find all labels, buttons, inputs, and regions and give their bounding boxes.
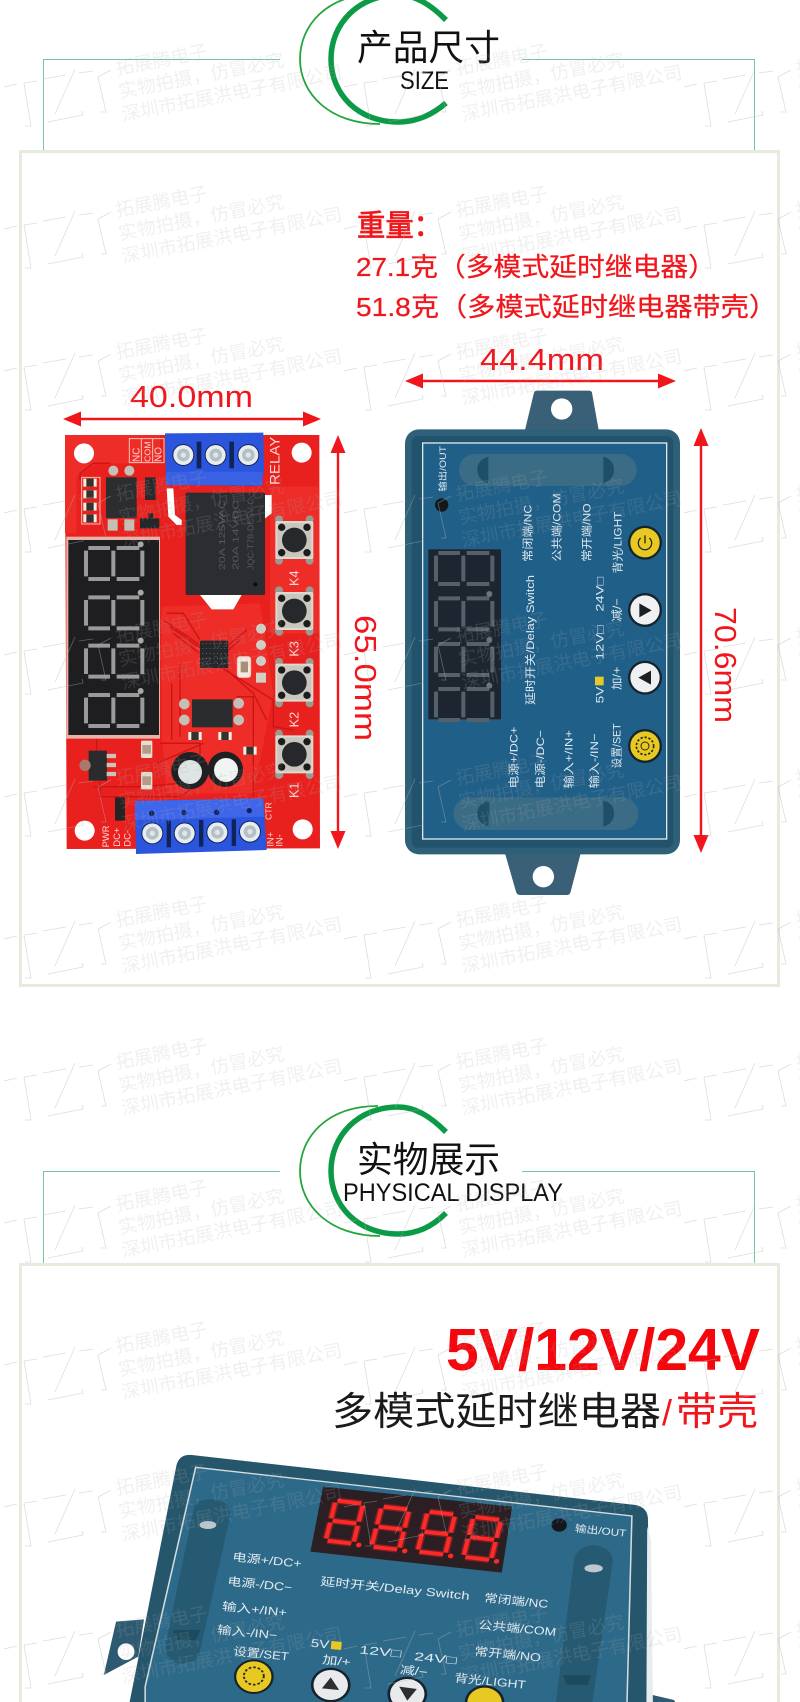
- silk labels PWR, IN, CTR: PWR: [101, 825, 111, 847]
- dimension: 65.0mm height arrow: [330, 435, 383, 849]
- small components top-left: [82, 466, 159, 531]
- weight text: 重量：: [357, 210, 442, 243]
- tactile buttons: K4: [287, 571, 301, 586]
- panel labels: 电源-/DC−: [227, 1575, 293, 1594]
- panel labels: 背光/LIGHT: [610, 511, 624, 573]
- product name heading: 带壳: [676, 1391, 758, 1434]
- panel labels: 加/+: [611, 667, 624, 690]
- case body: [405, 429, 680, 854]
- panel labels: 加/+: [322, 1653, 351, 1669]
- panel labels: 5V: [595, 686, 607, 703]
- panel labels: 电源+/DC+: [506, 727, 520, 788]
- panel labels: 常开端/NO: [581, 503, 594, 562]
- top terminal block: [165, 433, 264, 486]
- silk labels PWR, IN, CTR: DC-: [123, 830, 133, 847]
- panel labels: 背光/LIGHT: [454, 1672, 527, 1692]
- section header: physical display: PHYSICAL DISPLAY: [343, 1179, 563, 1207]
- case body: [129, 1455, 651, 1702]
- dimension: 44.4mm width arrow: [405, 342, 676, 388]
- panel labels: 输入-/IN−: [216, 1622, 278, 1642]
- bottom terminal block: [135, 798, 267, 854]
- panel labels: 设置/SET: [233, 1645, 290, 1663]
- silk labels NC COM NO: [129, 436, 282, 485]
- panel labels: 减/−: [611, 598, 624, 622]
- silk labels PWR, IN, CTR: IN+: [265, 832, 275, 847]
- panel labels: 输入-/IN−: [587, 733, 601, 788]
- optocoupler: [179, 698, 257, 755]
- panel labels: 输入+/IN+: [221, 1599, 288, 1619]
- weight text: 51.8克（多模式延时继电器带壳）: [356, 292, 777, 322]
- weight text: [356, 210, 777, 322]
- panel labels: 延时开关/Delay Switch: [320, 1575, 470, 1603]
- panel labels: 12V□: [359, 1643, 403, 1660]
- product name heading: 多模式延时继电器: [332, 1391, 661, 1434]
- panel labels: 24V□: [413, 1650, 459, 1667]
- panel labels: 设置/SET: [611, 723, 624, 768]
- front label: [145, 1467, 632, 1702]
- dimension: 40.0mm width arrow: 40.0mm: [130, 379, 253, 414]
- panel labels: 公共端/COM: [478, 1618, 557, 1639]
- panel labels: 延时开关/Delay Switch: [523, 575, 537, 705]
- photo: red relay circuit board: [65, 433, 320, 854]
- dimension: 65.0mm height arrow: 65.0mm: [348, 615, 383, 741]
- section header: product size: 产品尺寸: [357, 27, 500, 68]
- tactile buttons: K3: [287, 641, 301, 657]
- seven-segment display: [66, 537, 160, 739]
- silk labels PWR, IN, CTR: DC+: [112, 828, 122, 847]
- dimension: 40.0mm width arrow: [63, 379, 321, 426]
- panel labels: 输出/OUT: [574, 1522, 627, 1540]
- microcontroller and pads: [199, 624, 266, 683]
- panel labels: 公共端/COM: [551, 493, 564, 562]
- photo: enclosure front view: [405, 391, 680, 895]
- silk labels PWR, IN, CTR: [101, 802, 285, 847]
- product name heading: /: [662, 1392, 672, 1433]
- panel labels: 减/−: [399, 1663, 428, 1679]
- front label: [423, 443, 667, 839]
- dimension: 70.6mm height arrow: 70.6mm: [708, 607, 743, 723]
- tactile buttons: K1: [287, 783, 301, 798]
- panel buttons: [234, 1659, 504, 1702]
- panel labels: [216, 1522, 627, 1692]
- silk labels PWR, IN, CTR: CTR: [264, 802, 274, 820]
- panel labels: 电源+/DC+: [232, 1551, 303, 1570]
- weight text: 27.1克（多模式延时继电器）: [356, 252, 716, 282]
- panel labels: 电源-/DC−: [533, 730, 547, 788]
- panel: dimensions: [20, 152, 778, 986]
- relay: 20A 14VDC: [231, 500, 240, 570]
- tactile buttons: K2: [287, 712, 301, 727]
- panel labels: 常开端/NO: [473, 1645, 542, 1664]
- section header: physical display: [44, 1106, 754, 1263]
- voltage heading: 5V/12V/24V: [446, 1317, 760, 1383]
- panel: physical display: [20, 1264, 778, 1702]
- mounting tabs: [525, 391, 599, 430]
- mounting holes: [74, 443, 313, 841]
- section header: physical display: 实物展示: [357, 1139, 500, 1180]
- regulator and capacitors: [79, 741, 243, 821]
- silk labels NC COM NO: NO: [154, 447, 165, 462]
- panel labels: 常闭端/NC: [483, 1592, 549, 1611]
- panel labels: 12V□: [595, 625, 607, 660]
- silk labels NC COM NO: NC: [131, 448, 142, 462]
- silk labels PWR, IN, CTR: IN-: [275, 834, 285, 847]
- panel buttons: [628, 526, 662, 763]
- section header: product size: SIZE: [400, 67, 449, 95]
- tactile buttons: [275, 515, 314, 798]
- section header: product size: [44, 0, 754, 150]
- display window: [428, 549, 501, 720]
- output LED: [552, 1518, 567, 1532]
- clip slots: [165, 1499, 613, 1702]
- panel labels: 输入+/IN+: [561, 730, 575, 788]
- photo: enclosure angled view: [104, 1455, 678, 1702]
- dimension: 44.4mm width arrow: 44.4mm: [480, 342, 604, 377]
- relay: [186, 493, 265, 595]
- silkscreen white shapes: [167, 488, 272, 609]
- panel labels: 24V□: [595, 576, 607, 612]
- silk labels NC COM NO: RELAY: [266, 436, 282, 485]
- side tabs: [104, 1619, 144, 1675]
- clip slots: [453, 454, 638, 830]
- panel labels: 常闭端/NC: [521, 505, 534, 562]
- panel labels: 输出/OUT: [437, 445, 448, 492]
- lit display: [310, 1487, 512, 1573]
- silk labels NC COM NO: COM: [142, 441, 152, 462]
- panel labels: [437, 445, 624, 788]
- relay: JQC-T78-DC5V-C: [246, 498, 255, 570]
- panel labels: 5V: [310, 1637, 331, 1651]
- dimension: 70.6mm height arrow: [694, 428, 743, 853]
- relay: 20A 125VAC: [218, 500, 227, 570]
- output LED: [435, 498, 448, 512]
